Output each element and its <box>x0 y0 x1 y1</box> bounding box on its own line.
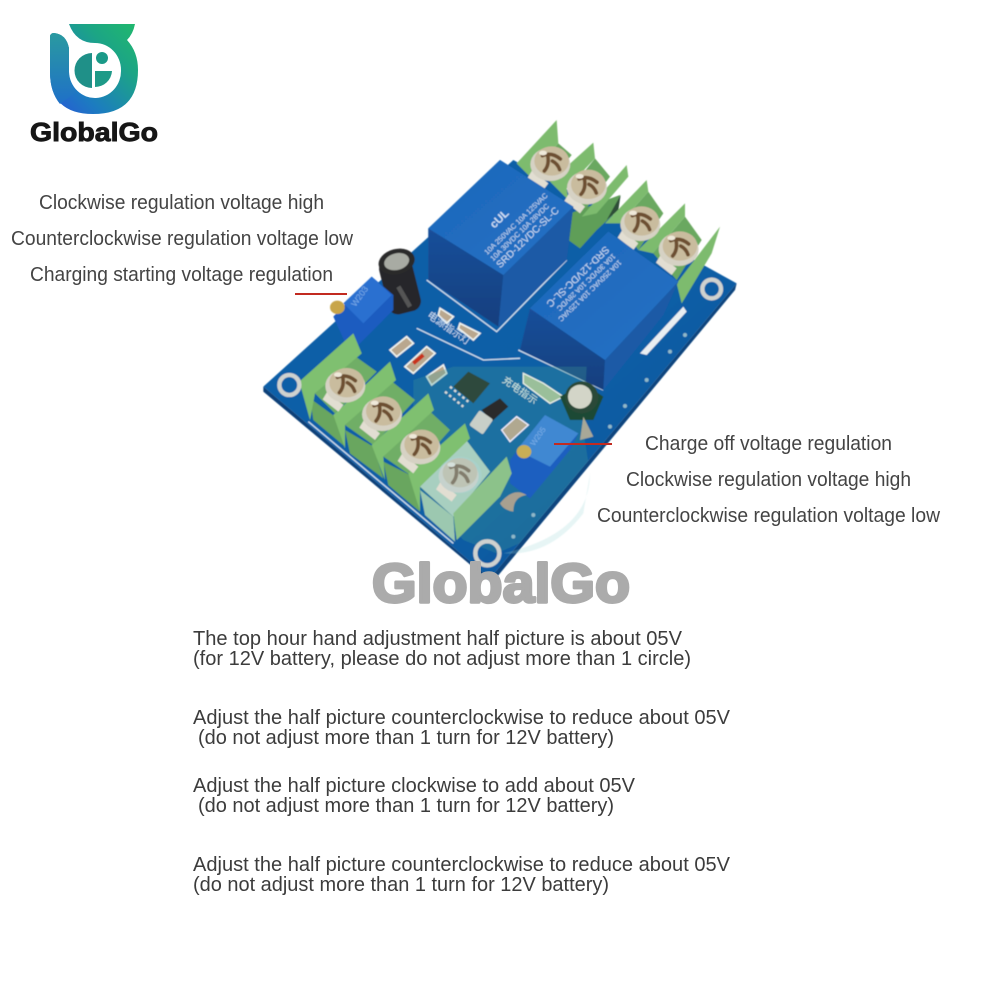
ic chips over teal watermark <box>413 367 590 554</box>
instruction notes: (do not adjust more than 1 turn for 12V battery) <box>198 795 614 817</box>
top-left adjustment labels: Charging starting voltage regulation <box>30 264 333 286</box>
logo <box>30 24 158 147</box>
product photo: circuit board <box>263 120 737 583</box>
watermark wordmark: GlobalGo <box>372 552 630 614</box>
trimmer right <box>510 415 578 498</box>
silk components <box>390 308 480 385</box>
white cut strip <box>640 307 687 355</box>
right adjustment labels <box>597 433 941 527</box>
edge contact holes <box>511 333 687 539</box>
top terminal blocks <box>517 120 720 303</box>
relay 1 <box>428 160 573 327</box>
trimmer left: W203 <box>349 284 370 308</box>
bottom terminal blocks <box>299 333 512 542</box>
pcb <box>263 160 737 578</box>
top-left adjustment labels <box>11 192 354 286</box>
icon: GlobalGo emblem <box>50 24 138 114</box>
instruction notes: Adjust the half picture clockwise to add about 05V <box>193 775 636 797</box>
instruction notes: (for 12V battery, please do not adjust more than 1 circle) <box>193 648 691 670</box>
right adjustment labels: Charge off voltage regulation <box>645 433 892 455</box>
instruction notes: (do not adjust more than 1 turn for 12V battery) <box>193 874 609 896</box>
instruction notes: (do not adjust more than 1 turn for 12V battery) <box>198 727 614 749</box>
top-left adjustment labels: Counterclockwise regulation voltage low <box>11 228 354 250</box>
trimmer right: W205 <box>528 425 548 448</box>
capacitor left <box>376 245 423 317</box>
trimmer left <box>330 277 393 353</box>
instruction notes: Adjust the half picture counterclockwise to reduce about 05V <box>193 707 731 729</box>
relay 1: 10A 30VDC 10A 28VDC <box>488 201 552 263</box>
relay 1: cUL <box>488 207 512 231</box>
relay 2 <box>520 232 678 390</box>
logo wordmark: GlobalGo <box>30 117 158 147</box>
relay 2: 10A 250VAC 10A 125VAC <box>556 258 624 324</box>
top-left adjustment labels: Clockwise regulation voltage high <box>39 192 324 214</box>
silver capacitor crescent <box>500 492 527 512</box>
instruction notes: The top hour hand adjustment half picture is about 05V <box>193 628 683 650</box>
capacitor right <box>560 381 603 440</box>
instruction notes: Adjust the half picture counterclockwise to reduce about 05V <box>193 854 731 876</box>
relay 2: SRD-12VDC-SL-C <box>544 243 611 309</box>
mounting holes <box>279 280 721 565</box>
ic chips over teal watermark: 充电指示 <box>500 373 540 407</box>
callout lines <box>295 293 612 445</box>
relay 1: 10A 250VAC 10A 125VAC <box>482 191 550 257</box>
pcb white silk lines <box>308 260 603 543</box>
relay 2: 10A 30VDC 10A 28VDC <box>554 252 618 313</box>
relay 1: SRD-12VDC-SL-C <box>495 205 562 271</box>
right adjustment labels: Counterclockwise regulation voltage low <box>597 505 941 527</box>
right adjustment labels: Clockwise regulation voltage high <box>626 469 911 491</box>
instruction notes <box>193 628 731 896</box>
silk components: 电源指示灯 <box>425 308 473 348</box>
